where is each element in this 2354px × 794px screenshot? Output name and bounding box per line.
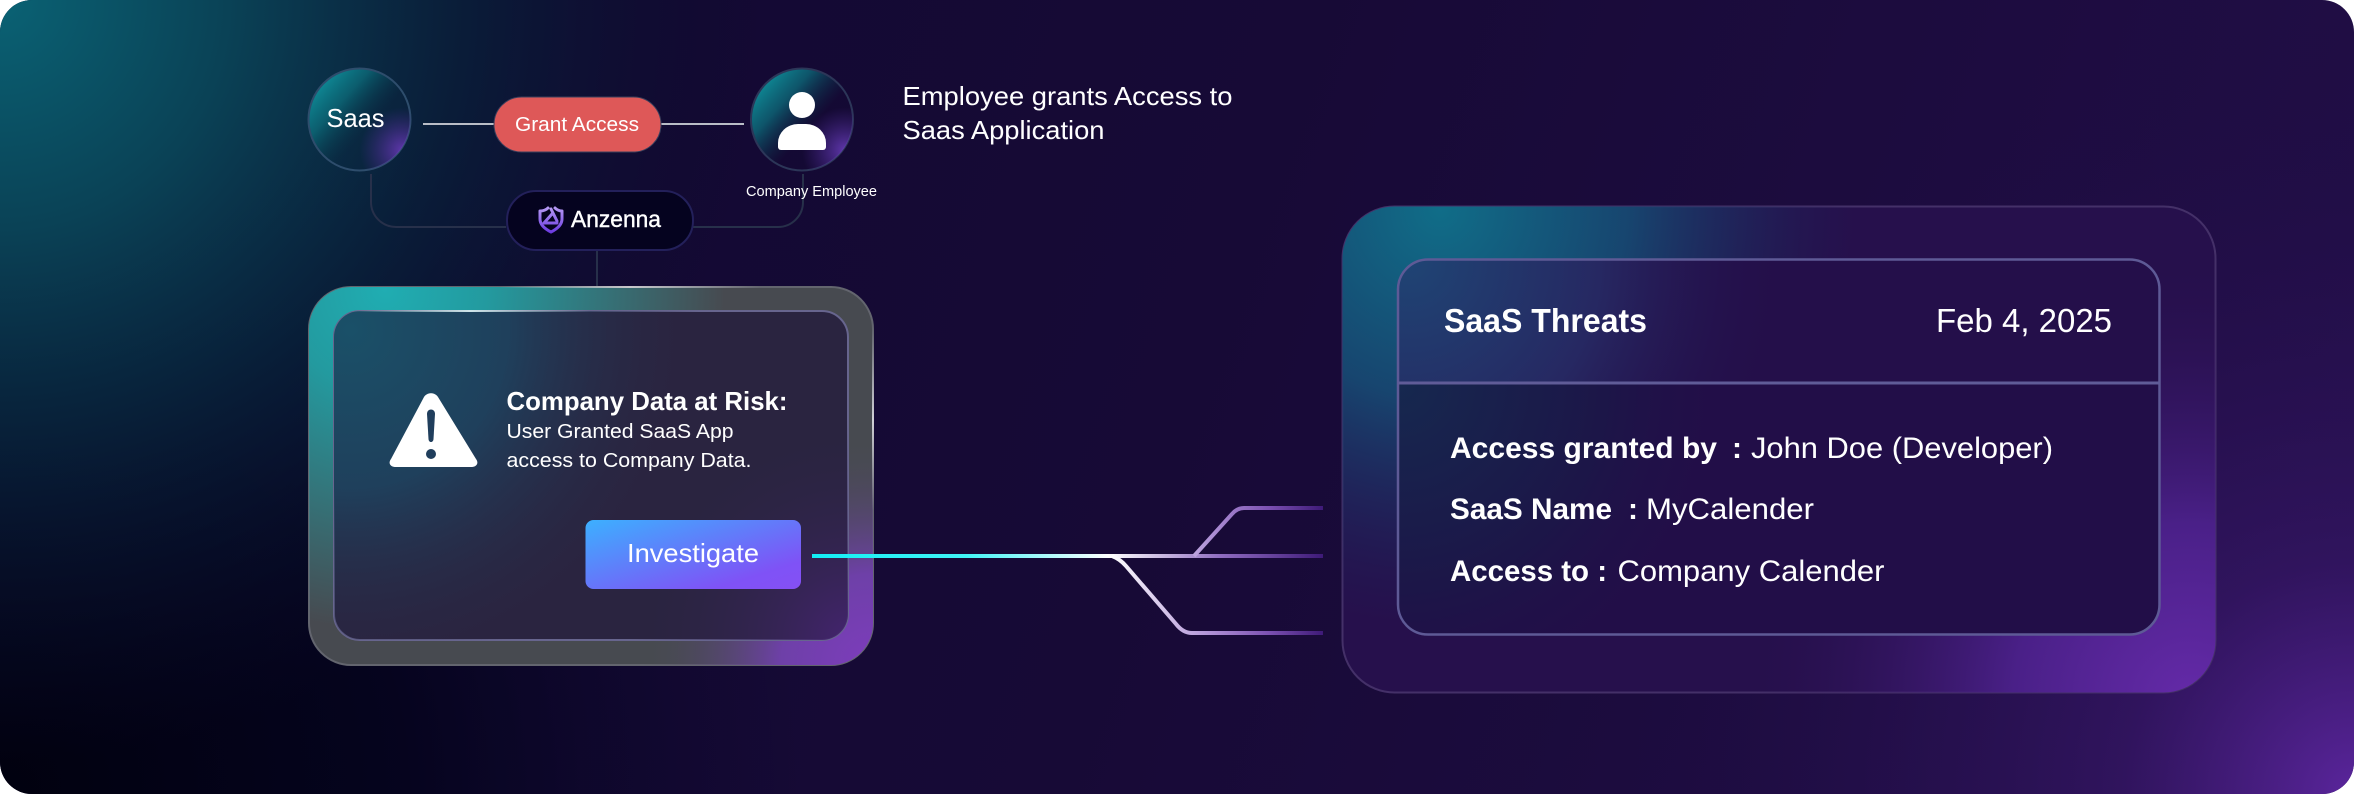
card details text: SaaS Name: [1450, 493, 1612, 526]
Company Employee circle: [751, 68, 853, 170]
Company Employee label: Company Employee: [746, 183, 877, 200]
card details text: Access to :: [1450, 555, 1607, 588]
icon: warning triangle: [390, 393, 477, 467]
card header text: Feb 4, 2025: [1936, 302, 2112, 339]
card header text: [1444, 308, 2111, 336]
Employee grants access description: Employee grants Access to: [902, 81, 1232, 111]
panel: Company Data at Risk alert: [309, 287, 873, 665]
arrow: branching connector from Investigate to SaaS Threats: [812, 508, 1323, 633]
Grant Access pill: [494, 97, 661, 152]
alert text: access to Company Data.: [506, 450, 752, 472]
card details text: :: [1628, 493, 1638, 526]
card details text: [1450, 432, 2053, 588]
Employee grants access description: [902, 81, 1232, 145]
alert text: [506, 386, 788, 472]
card details text: MyCalender: [1646, 493, 1814, 526]
connector lines from Saas and Employee to Anzenna: [371, 174, 803, 286]
card details text: Company Calender: [1618, 555, 1884, 588]
icon: Anzenna shield logo: [540, 208, 562, 232]
SaaS Threats inner panel: [1398, 260, 2160, 634]
Grant Access pill: Grant Access: [515, 114, 639, 136]
alert text: Company Data at Risk:: [506, 386, 788, 416]
Employee grants access description: Saas Application: [902, 115, 1104, 145]
card header text: SaaS Threats: [1444, 302, 1647, 339]
icon: person: [778, 92, 826, 150]
Investigate button: Investigate: [627, 538, 759, 568]
Anzenna pill: Anzenna: [571, 206, 661, 232]
Investigate button: [586, 520, 801, 589]
card details text: :: [1732, 432, 1742, 465]
card details text: John Doe (Developer): [1751, 432, 2053, 465]
Saas circle: [308, 68, 410, 170]
card details text: Access granted by: [1450, 432, 1717, 465]
alert text: User Granted SaaS App: [506, 421, 734, 443]
panel: SaaS Threats card: [1342, 206, 2216, 692]
Anzenna pill: [507, 191, 693, 250]
Saas circle: Saas: [326, 103, 384, 133]
grant access connector lines: [423, 123, 744, 125]
